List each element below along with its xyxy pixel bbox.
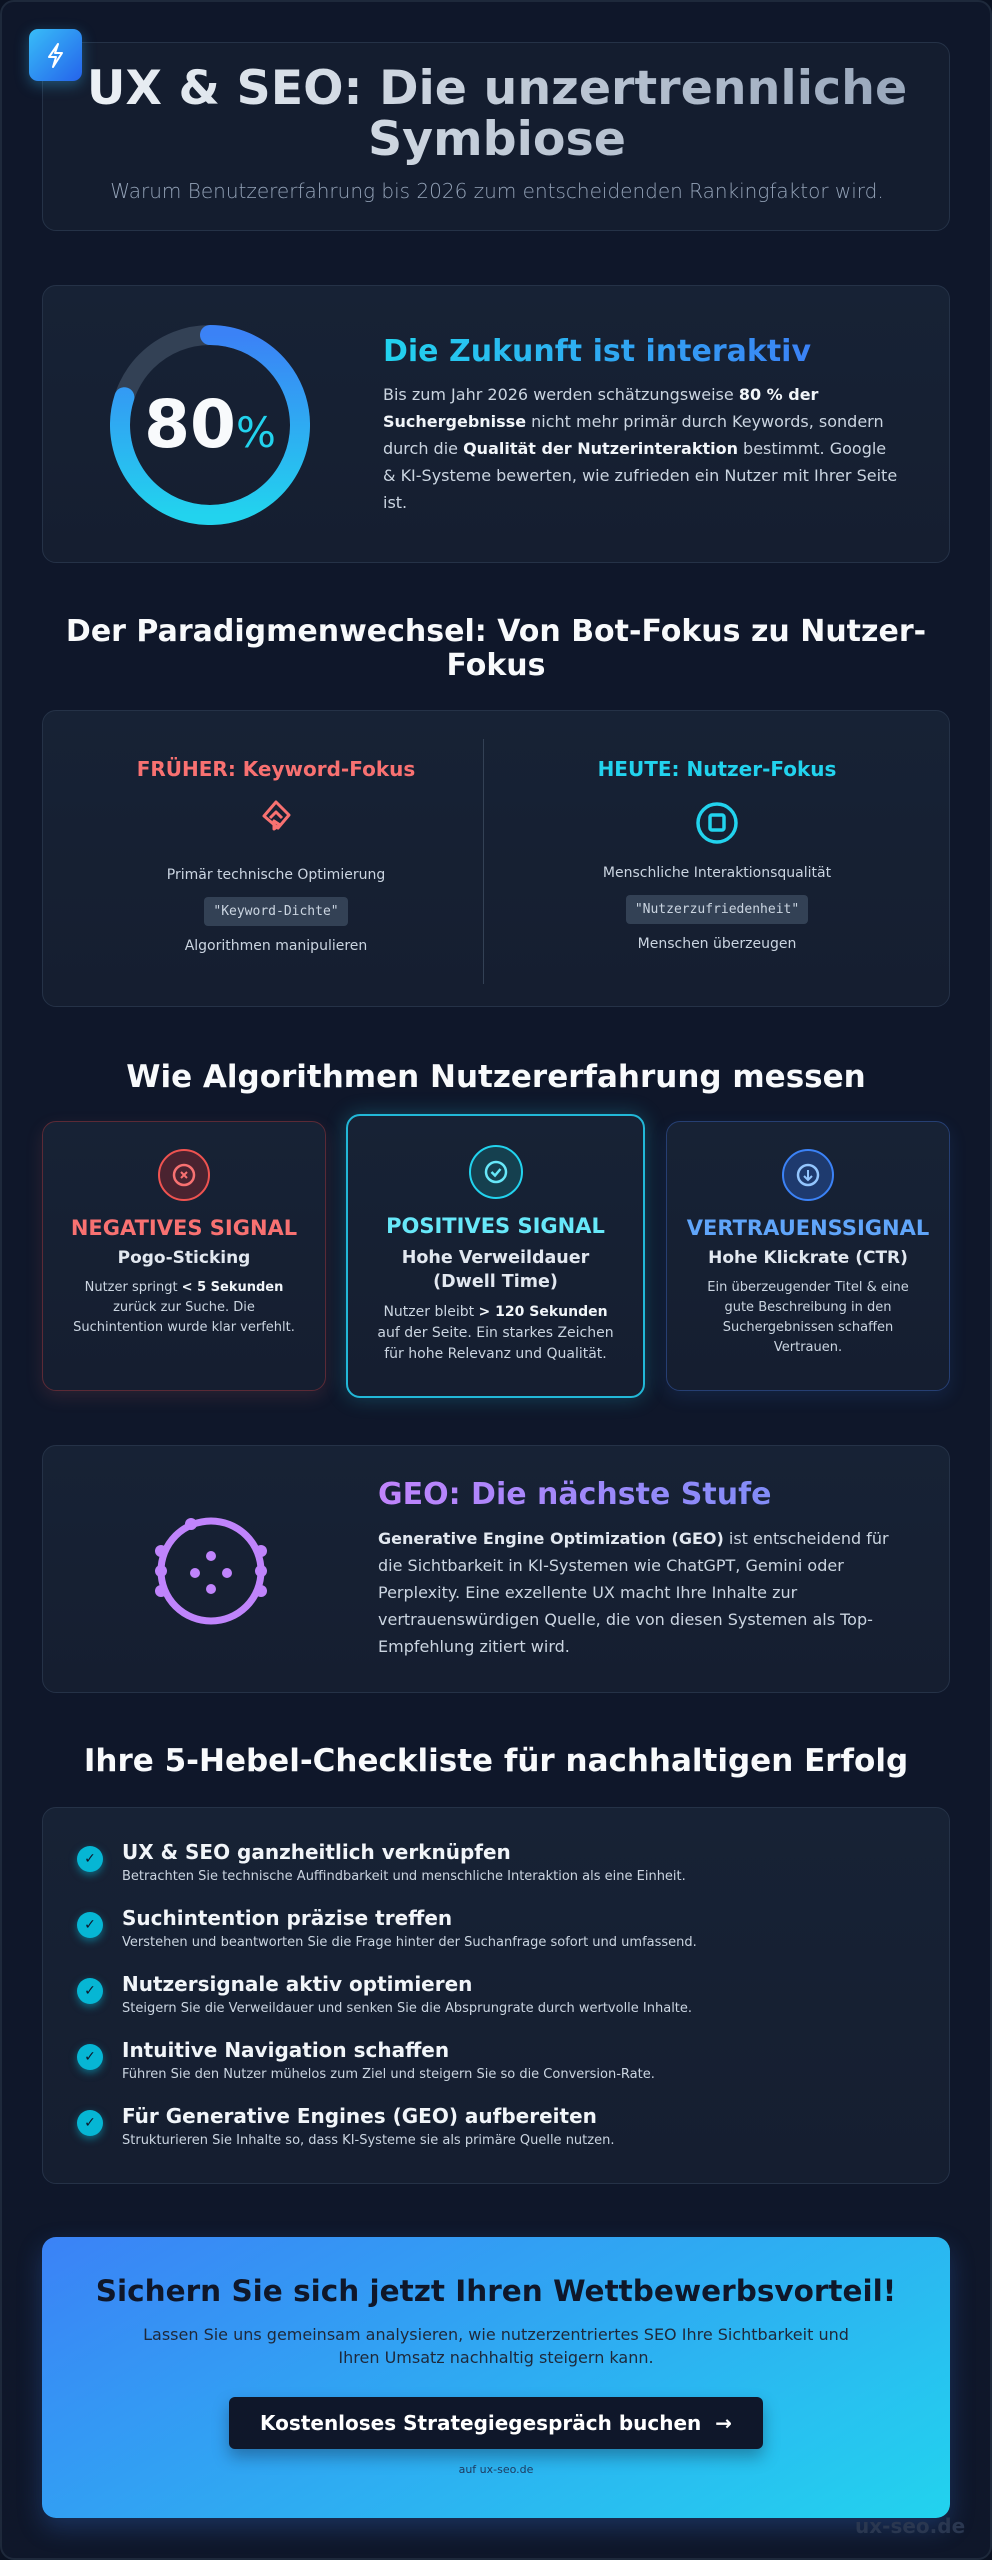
text block: & KI-Systeme bewerten, wie zufrieden ein Nutzer mit Ihrer Seite ist.: [383, 466, 897, 512]
chart: 80% ring: 80%: [144, 386, 276, 463]
left column: "Keyword-Dichte": [213, 904, 339, 919]
heading: Die Zukunft ist interaktiv: [383, 334, 811, 369]
text block: [383, 385, 897, 512]
CTA text: Lassen Sie uns gemeinsam analysieren, wie nutzerzentriertes SEO Ihre Sichtbarkeit und Ihren Umsatz nachhaltig steigern kann.: [143, 2325, 849, 2367]
panel: positive signal: [346, 1114, 645, 1398]
title: UX & SEO: Die unzertrennliche: [87, 61, 907, 116]
checklist items: Nutzersignale aktiv optimieren: [122, 1972, 472, 1996]
panel: trust signal: Ein überzeugender Titel & eine gute Beschreibung in den Suchergebnissen schaffen Vertrauen.: [707, 1280, 909, 1355]
checklist items: UX & SEO ganzheitlich verknüpfen: [122, 1840, 511, 1864]
heading: paradigm shift: Der Paradigmenwechsel: Von Bot-Fokus zu Nutzer-: [66, 614, 926, 649]
subtitle: Warum Benutzererfahrung bis 2026 zum entscheidenden Rankingfaktor wird.: [110, 179, 884, 203]
icon: lightning badge: [29, 29, 82, 81]
left column: Algorithmen manipulieren: [185, 938, 367, 954]
heading: paradigm shift: Fokus: [446, 648, 546, 683]
right column: Menschen überzeugen: [638, 936, 796, 952]
panel: positive signal: Hohe Verweildauer: [402, 1248, 589, 1268]
text block: Generative Engine Optimization (GEO) ist entscheidend für die Sichtbarkeit in KI-Systemen wie ChatGPT, Gemini oder Perplexity. Eine exzellente UX macht Ihre Inhalte zur vertrauenswürdigen Quelle, die von diesen Systemen als Top-Empfehlung zitiert wird.: [378, 1529, 889, 1656]
icon: x circle: [158, 1149, 210, 1201]
left column: [137, 757, 415, 954]
panel: compare card: [42, 710, 950, 1007]
checklist items: ✓: [84, 2115, 96, 2131]
right column: "Nutzerzufriedenheit": [635, 902, 799, 917]
checklist items: Suchintention präzise treffen: [122, 1906, 452, 1930]
panel: stat card: [42, 285, 950, 563]
checklist items: Betrachten Sie technische Auffindbarkeit und menschliche Interaktion als eine Einheit.: [122, 1869, 686, 1884]
panel: trust signal: Hohe Klickrate (CTR): [708, 1248, 908, 1268]
panel: CTA: [42, 2237, 950, 2518]
checklist items: ✓: [84, 1851, 96, 1867]
heading: paradigm shift: [66, 614, 926, 683]
heading: checklist: Ihre 5-Hebel-Checkliste für nachhaltigen Erfolg: [84, 1743, 908, 1779]
checklist items: ✓: [84, 1917, 96, 1933]
panel: trust signal: VERTRAUENSSIGNAL: [687, 1216, 929, 1240]
text block: Bis zum Jahr 2026 werden schätzungsweise 80 % der Suchergebnisse nicht mehr primär durch Keywords, sondern durch die Qualität der Nutzerinteraktion bestimmt. Google: [383, 385, 886, 458]
panel: negative signal: Pogo-Sticking: [118, 1248, 250, 1268]
checklist items: Führen Sie den Nutzer mühelos zum Ziel und steigern Sie so die Conversion-Rate.: [122, 2067, 655, 2082]
footer watermark: ux-seo.de: [855, 2514, 965, 2538]
panel: negative signal: [42, 1121, 326, 1391]
icon: check circle: [469, 1145, 523, 1199]
checklist items: Steigern Sie die Verweildauer und senken Sie die Absprungrate durch wertvolle Inhalte.: [122, 2001, 692, 2016]
checklist items: ✓: [84, 1983, 96, 1999]
icon: download circle: [782, 1149, 834, 1201]
left column: FRÜHER: Keyword-Fokus: [137, 757, 415, 781]
icon: device: [696, 802, 738, 844]
right column: [598, 757, 836, 952]
title: Symbiose: [368, 112, 626, 167]
title: [43, 63, 951, 165]
panel: checklist: [42, 1807, 950, 2184]
heading: GEO: Die nächste Stufe: [378, 1477, 771, 1512]
heading: algorithms: Wie Algorithmen Nutzererfahrung messen: [126, 1059, 866, 1095]
panel: negative signal: NEGATIVES SIGNAL: [71, 1216, 297, 1240]
checklist items: [73, 1840, 697, 2148]
CTA button: [229, 2397, 763, 2449]
icon: keyword tag: [262, 800, 291, 830]
panel: negative signal: Nutzer springt < 5 Sekunden zurück zur Suche. Die Suchintention wurde klar verfehlt.: [73, 1280, 295, 1335]
left column: Primär technische Optimierung: [167, 867, 385, 883]
right column: Menschliche Interaktionsqualität: [603, 865, 831, 881]
checklist items: Intuitive Navigation schaffen: [122, 2038, 449, 2062]
checklist items: Strukturieren Sie Inhalte so, dass KI-Systeme sie als primäre Quelle nutzen.: [122, 2133, 614, 2148]
icon: GEO brain: [155, 1518, 267, 1624]
small link text: auf ux-seo.de: [459, 2463, 533, 2476]
panel: positive signal: (Dwell Time): [433, 1272, 558, 1292]
panel: trust signal: [666, 1121, 950, 1391]
chart: 80% ring: [110, 325, 310, 525]
panel: GEO: [42, 1445, 950, 1693]
checklist items: Für Generative Engines (GEO) aufbereiten: [122, 2104, 597, 2128]
checklist items: ✓: [84, 2049, 96, 2065]
panel: positive signal: Nutzer bleibt > 120 Sekunden auf der Seite. Ein starkes Zeichen für hohe Relevanz und Qualität.: [377, 1304, 614, 1362]
panel: positive signal: POSITIVES SIGNAL: [386, 1214, 605, 1238]
right column: HEUTE: Nutzer-Fokus: [598, 757, 836, 781]
CTA heading: Sichern Sie sich jetzt Ihren Wettbewerbsvorteil!: [96, 2274, 896, 2308]
checklist items: Verstehen und beantworten Sie die Frage hinter der Suchanfrage sofort und umfassend.: [122, 1935, 697, 1950]
panel: title card: [42, 42, 950, 231]
CTA button: Kostenloses Strategiegespräch buchen →: [260, 2411, 732, 2435]
